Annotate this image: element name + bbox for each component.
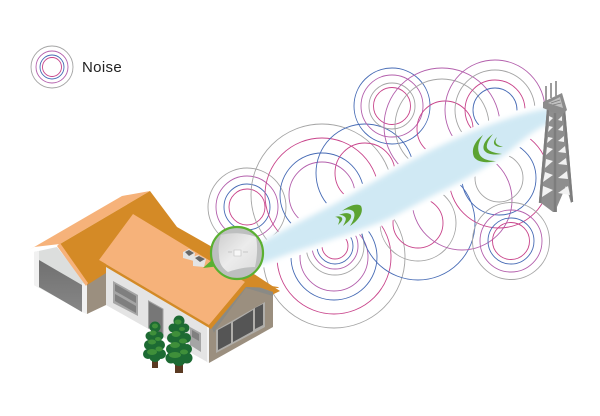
tower — [539, 81, 573, 212]
garage gable trim — [57, 243, 88, 286]
noise rings below the beam — [263, 128, 550, 328]
rooftop vents — [183, 249, 206, 267]
signal beam — [256, 108, 550, 265]
callout circle — [211, 227, 263, 279]
gable wall — [209, 282, 273, 363]
tower lattice openings — [542, 116, 570, 197]
noise rings above the beam — [208, 60, 545, 243]
main roof edge trim — [99, 260, 279, 329]
garage roof — [60, 191, 280, 330]
front door — [148, 301, 163, 336]
garage gable wall — [34, 247, 87, 314]
tower legs — [540, 110, 572, 212]
garage door — [39, 260, 82, 312]
gable window — [216, 302, 265, 353]
icon: signal waves near tower — [473, 134, 503, 162]
tree left — [143, 322, 166, 368]
dish callout — [203, 227, 263, 279]
foliage — [166, 316, 192, 366]
garage roof highlight — [29, 191, 150, 250]
foliage — [143, 322, 166, 362]
trunk — [152, 360, 158, 368]
icon: signal waves near dish — [335, 205, 362, 226]
connecting wall — [87, 273, 106, 314]
legend: noise — [31, 46, 122, 88]
icon: dish antenna — [219, 233, 257, 272]
house — [29, 191, 280, 363]
tower antennas — [546, 81, 556, 101]
tower top platform — [543, 93, 567, 114]
front window right — [190, 327, 201, 352]
tree right — [166, 316, 192, 373]
front window left — [113, 281, 138, 316]
trunk — [175, 362, 183, 373]
callout pointer — [203, 258, 220, 268]
legend icon: noise rings — [31, 46, 73, 88]
legend label: Noise — [82, 59, 122, 76]
main roof — [99, 214, 245, 325]
tower body — [539, 108, 573, 212]
gable shadow trim — [212, 283, 273, 333]
front wall — [106, 263, 209, 363]
